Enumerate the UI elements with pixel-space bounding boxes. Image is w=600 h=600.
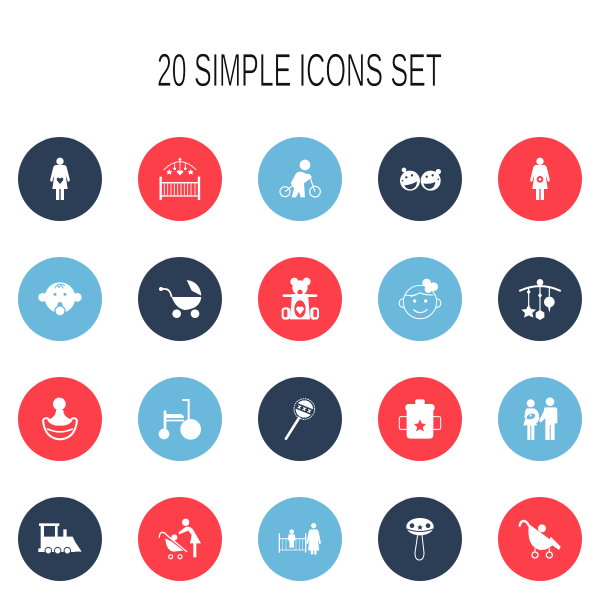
icon: oval rattle with loop — [378, 497, 462, 581]
icon: expecting couple — [498, 377, 582, 461]
icon: round rattle — [258, 377, 342, 461]
icon: folding stroller — [498, 497, 582, 581]
icon: sippy cup with star — [378, 377, 462, 461]
icon: pacifier — [18, 377, 102, 461]
title: 20 SIMPLE ICONS SET — [157, 44, 442, 96]
icon: toy train — [18, 497, 102, 581]
icon: tricycle — [138, 377, 222, 461]
icon: pregnant woman with baby — [498, 137, 582, 221]
icon: teddy bear — [258, 257, 342, 341]
icon: twin babies — [378, 137, 462, 221]
icon: child on balance bike — [258, 137, 342, 221]
icon: pregnant woman with heart — [18, 137, 102, 221]
icon: baby carriage — [138, 257, 222, 341]
icon: mother pushing stroller — [138, 497, 222, 581]
icon: baby girl face with bow — [378, 257, 462, 341]
icon: hanging crib mobile — [498, 257, 582, 341]
icon: crib with mobile — [138, 137, 222, 221]
icon: baby with pacifier — [18, 257, 102, 341]
icon: woman beside crib with child — [258, 497, 342, 581]
